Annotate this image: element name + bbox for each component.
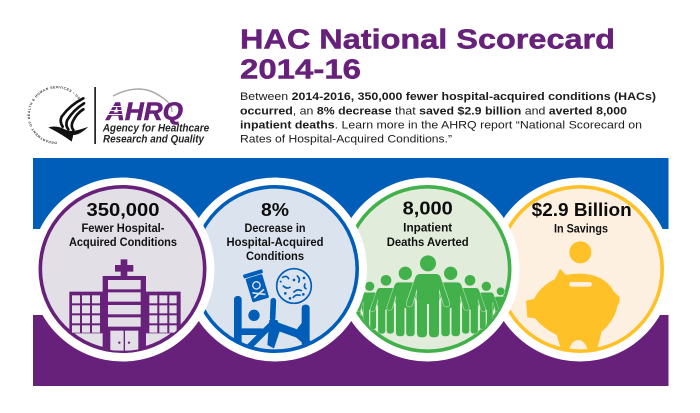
title	[240, 23, 615, 84]
decrease caption: Decrease in	[244, 223, 306, 235]
panel: savings	[504, 178, 664, 362]
logo: AHRQ wordmark	[102, 89, 209, 146]
deaths figure: 8,000	[403, 198, 453, 218]
logo: HHS seal: DEPARTMENT OF HEALTH & HUMAN SERVICES • USA	[28, 86, 81, 144]
intro paragraph: occurred , an 8% decrease that saved $2.9 billion and averted 8,000	[240, 105, 627, 117]
logo: divider	[94, 87, 96, 144]
deaths caption: Inpatient	[403, 223, 452, 235]
icon: bottle, germs and fallen patient	[234, 269, 314, 349]
blue band	[33, 158, 668, 229]
decrease caption	[226, 223, 324, 263]
logo: AHRQ wordmark: Research and Quality	[103, 134, 205, 146]
panel: fewer conditions	[30, 178, 214, 362]
fewer conditions caption	[69, 223, 177, 249]
icon: hospital	[69, 259, 181, 356]
fewer conditions caption: Acquired Conditions	[69, 237, 177, 249]
panel: deaths averted	[336, 178, 520, 362]
decrease caption: Hospital-Acquired	[226, 237, 324, 249]
savings figure: $2.9 Billion	[532, 199, 632, 220]
deaths caption	[387, 223, 469, 249]
fewer conditions caption: Fewer Hospital-	[82, 223, 165, 235]
intro paragraph: inpatient deaths . Learn more in the AHRQ report “National Scorecard on	[240, 119, 642, 131]
decrease figure: 8%	[261, 199, 289, 220]
icon: coin and piggy bank	[526, 241, 620, 352]
logo: AHRQ wordmark: AHRQ	[105, 98, 184, 126]
icon: crowd of people	[344, 255, 511, 337]
fewer conditions figure: 350,000	[86, 199, 160, 220]
intro paragraph: Between 2014-2016, 350,000 fewer hospital-acquired conditions (HACs)	[240, 91, 656, 103]
title: 2014-16	[240, 53, 361, 84]
intro paragraph	[240, 91, 656, 145]
purple band	[33, 315, 668, 386]
logo: AHRQ wordmark: Agency for Healthcare	[102, 123, 209, 135]
intro paragraph: Rates of Hospital-Acquired Conditions.”	[240, 133, 452, 145]
panel: decrease	[183, 178, 367, 362]
savings caption: In Savings	[554, 223, 608, 235]
deaths caption: Deaths Averted	[387, 237, 469, 249]
decrease caption: Conditions	[246, 251, 304, 263]
title: HAC National Scorecard	[240, 23, 615, 54]
